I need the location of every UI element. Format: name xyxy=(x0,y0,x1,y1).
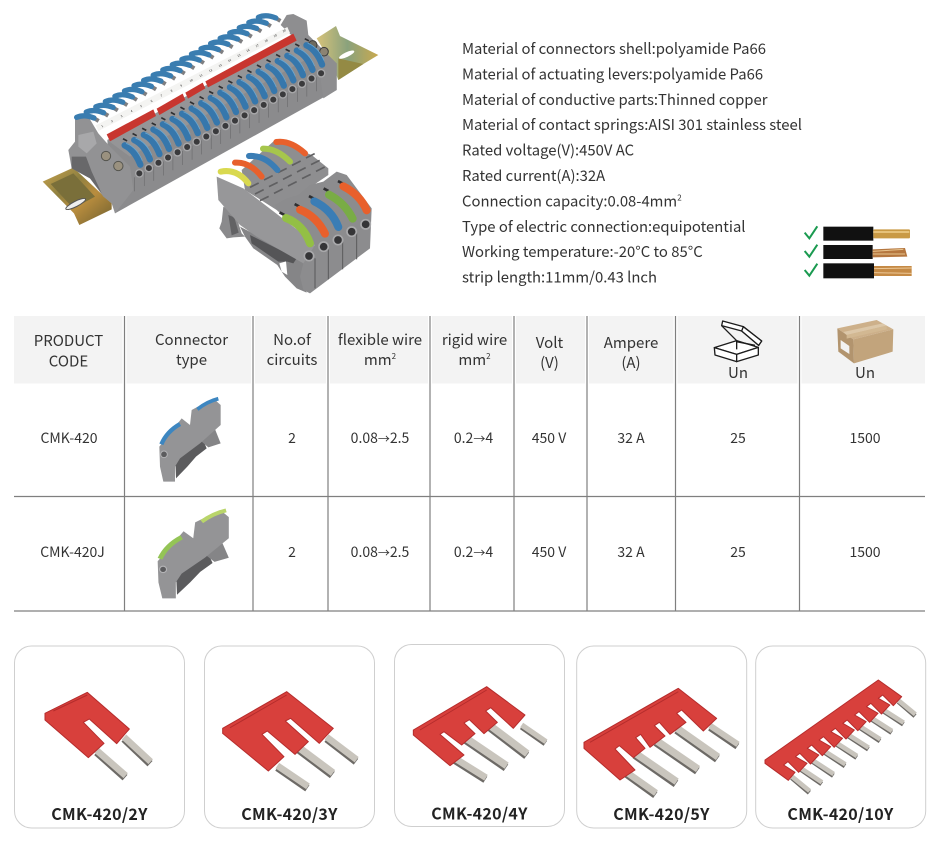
product code: CMK-420 xyxy=(40,428,98,448)
white numbered marker strip: 14 xyxy=(227,58,232,63)
solid wire xyxy=(805,226,910,241)
row: CMK-420 xyxy=(40,398,881,482)
white numbered marker strip: 19 xyxy=(273,33,278,38)
rigid wire range: 0.2→4 xyxy=(454,542,493,562)
specification table xyxy=(14,316,925,611)
carton quantity: 1500 xyxy=(849,428,881,448)
column header: number of circuits: No.of xyxy=(273,329,311,350)
column header: product code: CODE xyxy=(49,350,88,372)
flexible wire range: 0.08→2.5 xyxy=(351,542,410,562)
flexible wire range: 0.08→2.5 xyxy=(351,428,410,448)
current: 32 A xyxy=(617,428,645,448)
column header: flexible wire: flexible wire xyxy=(338,329,422,350)
spec: shell material: Material of connectors shell:polyamide Pa66 xyxy=(462,38,766,59)
icon: 5-pole red jumper xyxy=(584,688,738,795)
white numbered marker strip: 3 xyxy=(120,114,123,118)
rigid wire range: 0.2→4 xyxy=(454,428,493,448)
white numbered marker strip: 1 xyxy=(101,124,104,128)
icon: 3-pole red jumper xyxy=(223,692,357,788)
white numbered marker strip xyxy=(96,27,290,131)
left end clamp xyxy=(68,117,133,213)
panel: CMK-420/5Y jumper xyxy=(577,646,747,828)
white numbered marker strip: 10 xyxy=(189,78,194,83)
icon: open inner box xyxy=(714,321,762,362)
white numbered marker strip: 5 xyxy=(140,104,143,108)
spec: rated current: Rated current(A):32A xyxy=(462,165,605,186)
rear block xyxy=(242,140,328,210)
spec: conductive parts: Material of conductive parts:Thinned copper xyxy=(462,89,768,110)
body xyxy=(107,33,337,213)
spec: connection capacity: 2 xyxy=(677,192,682,204)
column header: ampere: (A) xyxy=(621,352,641,373)
column header: connector type: type xyxy=(176,349,207,370)
column header: rigid wire: mm xyxy=(458,349,486,370)
small five-way colored connector block xyxy=(217,140,372,293)
stranded wire xyxy=(805,245,907,259)
caption: CMK-420/2Y xyxy=(51,801,148,825)
red jumper bars xyxy=(107,34,297,141)
icon: 4-pole red jumper xyxy=(413,687,546,780)
caption: CMK-420/5Y xyxy=(613,801,710,825)
icon: 2-pole red jumper xyxy=(45,692,151,778)
white numbered marker strip: 18 xyxy=(264,38,269,43)
spec: lever material: Material of actuating levers:polyamide Pa66 xyxy=(462,64,763,84)
DIN rail near end xyxy=(43,168,112,225)
column header: connector type: Connector xyxy=(155,329,228,350)
white numbered marker strip: 12 xyxy=(208,68,213,73)
column header: inner box units: Un xyxy=(728,362,748,383)
product code: CMK-420J xyxy=(40,542,105,562)
white numbered marker strip: 13 xyxy=(218,63,223,68)
white numbered marker strip: 9 xyxy=(180,83,183,88)
column header: flexible wire: 2 xyxy=(392,351,397,362)
panel: CMK-420/10Y jumper xyxy=(756,646,926,828)
front levers xyxy=(286,186,367,243)
voltage: 450 V xyxy=(532,428,567,448)
panel: CMK-420/3Y jumper xyxy=(204,646,374,828)
specification list xyxy=(462,38,802,288)
left screws xyxy=(101,151,123,171)
column header: number of circuits: circuits xyxy=(267,349,317,370)
spec: strip length: strip length:11mm/0.43 lnch xyxy=(462,266,657,288)
column header: volt: Volt xyxy=(536,332,563,353)
icon: 10-pole red jumper xyxy=(765,680,915,793)
column header: rigid wire: rigid wire xyxy=(442,329,507,350)
column header: flexible wire: mm xyxy=(364,349,392,370)
wire types with check marks xyxy=(805,226,912,278)
icon: blue lever connector xyxy=(159,398,221,482)
column header: volt: (V) xyxy=(540,352,559,373)
white numbered marker strip: 4 xyxy=(130,109,133,113)
caption: CMK-420/10Y xyxy=(787,801,894,825)
rail clip feet xyxy=(219,207,307,293)
spec: connection capacity: Connection capacity:0.08-4mm xyxy=(462,190,677,212)
right screws xyxy=(308,41,328,56)
fine stranded wire xyxy=(805,263,912,278)
wire holes xyxy=(304,220,370,261)
white numbered marker strip: 6 xyxy=(150,99,153,103)
front dividers xyxy=(315,233,357,288)
carton quantity: 1500 xyxy=(849,542,881,562)
rear lever row xyxy=(77,16,280,121)
DIN rail far end xyxy=(317,26,378,80)
icon: green lever connector xyxy=(158,510,229,598)
front block xyxy=(275,172,372,293)
spec: connection type: Type of electric connection:equipotential xyxy=(462,216,746,237)
long connector assembly with 20 blue levers xyxy=(43,14,378,225)
spec: rated voltage: Rated voltage(V):450V AC xyxy=(462,140,634,160)
front lever units xyxy=(123,38,325,191)
column header: carton units: Un xyxy=(855,362,875,383)
spec: working temperature: Working temperature:-20°C to 85°C xyxy=(462,241,703,262)
front lever slots xyxy=(279,180,343,216)
column header: rigid wire: 2 xyxy=(486,351,491,362)
circuits: 2 xyxy=(288,542,296,562)
product photo: DIN rail connector assemblies xyxy=(43,14,378,293)
column header: product code: PRODUCT xyxy=(34,330,103,351)
caption: CMK-420/4Y xyxy=(431,800,528,824)
white numbered marker strip: 16 xyxy=(245,48,251,53)
voltage: 450 V xyxy=(532,542,567,562)
white numbered marker strip: 20 xyxy=(282,28,287,33)
caption: CMK-420/3Y xyxy=(241,801,338,825)
white numbered marker strip: 8 xyxy=(170,88,173,93)
table header band xyxy=(14,316,925,384)
current: 32 A xyxy=(617,542,645,562)
inner box quantity: 25 xyxy=(730,542,746,562)
rear slits xyxy=(250,154,325,201)
spec: contact springs: Material of contact springs:AISI 301 stainless steel xyxy=(462,114,802,135)
panel: CMK-420/2Y jumper xyxy=(14,646,184,828)
white numbered marker strip: 17 xyxy=(255,43,260,48)
icon: cardboard shipping box xyxy=(837,320,893,363)
side panel xyxy=(217,177,315,263)
column header: ampere: Ampere xyxy=(604,332,658,353)
circuits: 2 xyxy=(288,428,296,448)
row: CMK-420J xyxy=(40,510,881,598)
white numbered marker strip: 11 xyxy=(198,73,204,78)
rear levers xyxy=(221,142,305,183)
panel: CMK-420/4Y jumper xyxy=(394,644,564,826)
white numbered marker strip: 15 xyxy=(236,53,242,58)
white numbered marker strip: 7 xyxy=(160,93,163,98)
inner box quantity: 25 xyxy=(730,428,746,448)
right end clamp xyxy=(281,14,337,98)
white numbered marker strip: 2 xyxy=(110,119,114,123)
